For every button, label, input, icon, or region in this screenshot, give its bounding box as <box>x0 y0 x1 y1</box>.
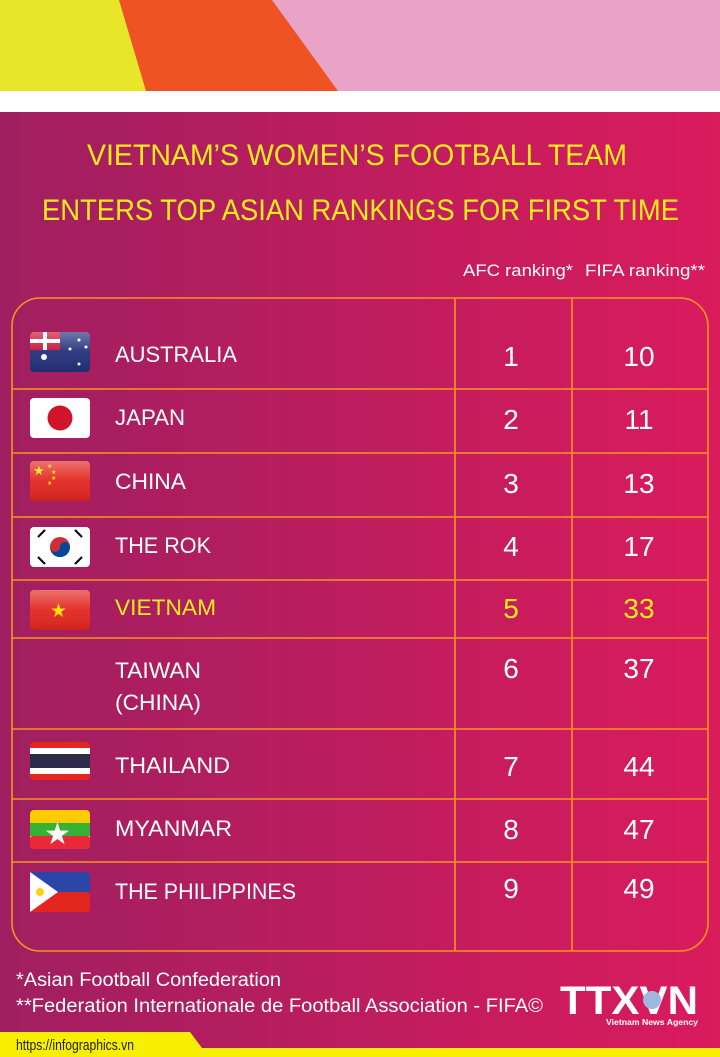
icon: flag philippines <box>30 872 90 912</box>
FIFA rankings: 47 <box>623 814 655 845</box>
country names: THAILAND <box>115 753 230 778</box>
FIFA rankings: 44 <box>623 751 655 782</box>
title: ENTERS TOP ASIAN RANKINGS FOR FIRST TIME <box>42 194 679 227</box>
FIFA rankings: 10 <box>623 341 655 372</box>
AFC rankings: 4 <box>503 531 519 562</box>
country names: AUSTRALIA <box>115 342 237 367</box>
country names: MYANMAR <box>115 816 232 841</box>
AFC rankings: 5 <box>503 593 519 624</box>
AFC rankings: 9 <box>503 873 519 904</box>
AFC rankings: 6 <box>503 653 519 684</box>
country names: TAIWAN <box>115 658 201 683</box>
footer url bar: https://infographics.vn <box>16 1037 134 1054</box>
AFC rankings: 2 <box>503 404 519 435</box>
icon: flag australia <box>30 332 90 372</box>
column headers: FIFA ranking** <box>585 261 705 280</box>
AFC rankings: 7 <box>503 751 519 782</box>
footnotes <box>16 970 543 1017</box>
icon: flag china <box>30 461 90 501</box>
country names: VIETNAM <box>115 595 216 620</box>
FIFA rankings: 49 <box>623 873 655 904</box>
table <box>12 298 708 951</box>
flags <box>30 332 90 912</box>
icon: flag china: ★ <box>47 480 52 487</box>
icon: flag china: ★ <box>47 463 52 470</box>
AFC rankings: 3 <box>503 468 519 499</box>
footnotes: **Federation Internationale de Football Association - FIFA© <box>16 996 543 1017</box>
icon: flag vietnam: ★ <box>50 601 67 622</box>
FIFA rankings: 11 <box>624 404 654 435</box>
AFC rankings <box>503 341 519 904</box>
icon: flag japan <box>30 398 90 438</box>
FIFA rankings: 33 <box>623 593 655 624</box>
icon: flag china: ★ <box>51 469 56 476</box>
icon: flag korea <box>30 527 90 567</box>
title <box>42 139 679 227</box>
column headers: AFC ranking* <box>463 261 573 280</box>
footnotes: *Asian Football Confederation <box>16 970 281 991</box>
country names: JAPAN <box>115 405 185 430</box>
FIFA rankings: 17 <box>623 531 655 562</box>
footer url bar <box>0 1032 720 1057</box>
AFC rankings: 8 <box>503 814 519 845</box>
logo TTXVN: Vietnam News Agency <box>606 1018 699 1027</box>
title: VIETNAM’S WOMEN’S FOOTBALL TEAM <box>87 139 627 172</box>
logo TTXVN: TTXVN <box>560 979 698 1023</box>
icon: flag vietnam <box>30 590 90 630</box>
country names <box>115 342 296 904</box>
icon: flag myanmar: ★ <box>44 818 71 851</box>
icon: flag thailand <box>30 742 90 780</box>
country names: (CHINA) <box>115 690 201 715</box>
top banner <box>0 0 720 112</box>
country names: CHINA <box>115 469 186 494</box>
column headers <box>463 261 705 280</box>
icon: flag china: ★ <box>33 463 45 478</box>
country names: THE PHILIPPINES <box>115 879 296 904</box>
FIFA rankings: 13 <box>623 468 655 499</box>
country names: THE ROK <box>115 533 211 558</box>
icon: flag china: ★ <box>51 475 56 482</box>
FIFA rankings: 37 <box>623 653 655 684</box>
icon: flag myanmar <box>30 810 90 851</box>
AFC rankings: 1 <box>503 341 519 372</box>
FIFA rankings <box>623 341 655 904</box>
